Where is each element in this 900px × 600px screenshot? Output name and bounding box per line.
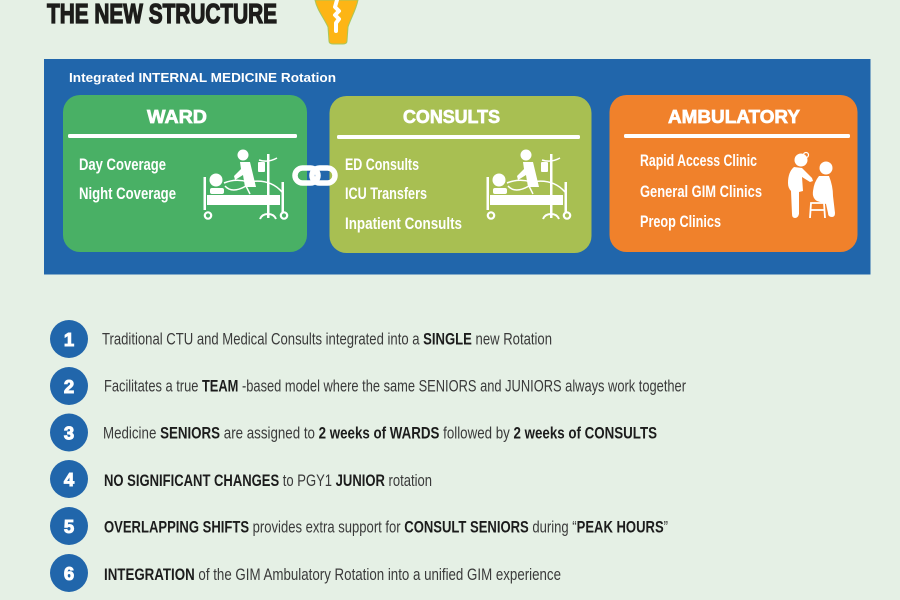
list item 6 bbox=[50, 554, 561, 592]
list item 5: OVERLAPPING SHIFTS provides extra support for CONSULT SENIORS during “PEAK HOURS” bbox=[104, 518, 668, 536]
list item 4 bbox=[50, 460, 432, 498]
icon: hospital bed with nurse bbox=[486, 150, 570, 219]
list item 2 bbox=[50, 367, 686, 405]
list item 5: 5 bbox=[64, 516, 74, 537]
card: consults bbox=[330, 96, 592, 253]
card: ambulatory bbox=[610, 95, 858, 252]
list item 4: 4 bbox=[64, 469, 75, 490]
list item 2: Facilitates a true TEAM -based model where the same SENIORS and JUNIORS always work together bbox=[104, 378, 686, 396]
icon: doctor examining seated patient bbox=[788, 152, 835, 218]
list item 6: INTEGRATION of the GIM Ambulatory Rotation into a unified GIM experience bbox=[104, 566, 561, 584]
ambulatory items: Rapid Access Clinic bbox=[640, 151, 757, 170]
consults heading: CONSULTS bbox=[403, 107, 500, 127]
panel: integrated internal medicine rotation bbox=[44, 59, 870, 274]
list item 3: 3 bbox=[64, 422, 74, 444]
icon: chain link bbox=[295, 168, 335, 183]
list item 2: 2 bbox=[64, 376, 74, 397]
ward items bbox=[79, 155, 176, 203]
consults items: ED Consults bbox=[345, 155, 419, 174]
list item 5 bbox=[50, 507, 668, 545]
ambulatory items: General GIM Clinics bbox=[640, 182, 762, 201]
list item 1 bbox=[50, 320, 552, 358]
ambulatory items: Preop Clinics bbox=[640, 212, 721, 231]
list item 3: Medicine SENIORS are assigned to 2 weeks of WARDS followed by 2 weeks of CONSULTS bbox=[103, 424, 657, 442]
ambulatory heading: AMBULATORY bbox=[668, 107, 800, 127]
list item 4: NO SIGNIFICANT CHANGES to PGY1 JUNIOR rotation bbox=[104, 472, 432, 490]
icon: hospital bed with nurse bbox=[204, 150, 287, 219]
consults items: Inpatient Consults bbox=[345, 214, 462, 233]
card: ward bbox=[63, 95, 307, 252]
icon: light bulb bbox=[315, 0, 358, 44]
ward heading: WARD bbox=[147, 107, 207, 127]
list item 6: 6 bbox=[64, 563, 74, 584]
ward items: Night Coverage bbox=[79, 184, 176, 203]
list item 3 bbox=[50, 414, 657, 452]
ambulatory items bbox=[640, 151, 762, 231]
list item 1: 1 bbox=[64, 329, 74, 350]
consults items bbox=[345, 155, 462, 233]
consults items: ICU Transfers bbox=[345, 184, 427, 203]
ward items: Day Coverage bbox=[79, 155, 166, 174]
panel heading: Integrated INTERNAL MEDICINE Rotation bbox=[69, 70, 336, 85]
list item 1: Traditional CTU and Medical Consults integrated into a SINGLE new Rotation bbox=[102, 330, 552, 348]
